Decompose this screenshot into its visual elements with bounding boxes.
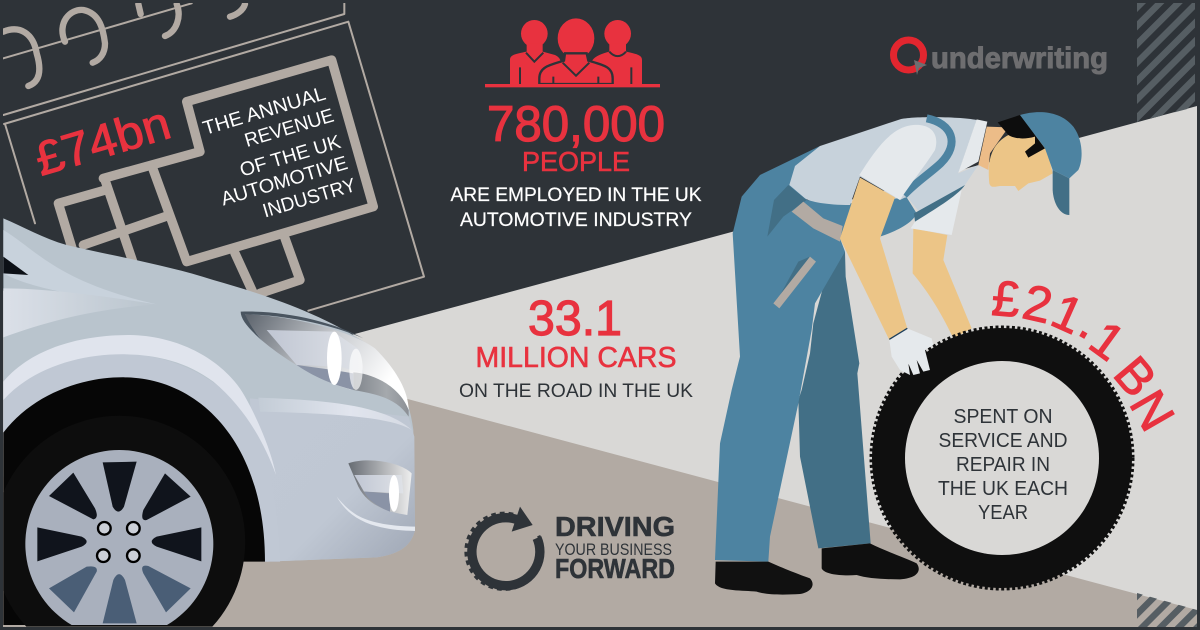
calendar outline xyxy=(4,22,424,311)
mechanic hair xyxy=(998,115,1045,158)
£21.1 BN curved figure: 1 xyxy=(1080,310,1135,372)
headlamp xyxy=(241,312,409,417)
shirt sleeve xyxy=(859,125,936,200)
mechanic figure xyxy=(715,112,1082,595)
annual revenue caption: OF THE UK xyxy=(237,131,343,182)
annual revenue caption xyxy=(200,83,358,222)
alloy rim xyxy=(25,450,213,625)
mechanic neck xyxy=(978,127,1008,170)
wheel nuts xyxy=(97,522,140,562)
car fender highlight xyxy=(3,335,276,475)
tyre centre xyxy=(905,361,1099,555)
people icon xyxy=(485,18,660,87)
left person xyxy=(510,20,561,84)
mechanic front arm xyxy=(840,178,907,340)
collar and arm lines xyxy=(520,52,631,84)
background: floor xyxy=(0,290,1197,630)
calendar date cells xyxy=(58,60,373,293)
logo ring xyxy=(894,40,924,70)
icon base line xyxy=(485,84,660,87)
underwriting logo xyxy=(894,40,1108,75)
cap peak xyxy=(1053,170,1069,215)
lower wheel spokes xyxy=(49,566,191,623)
mechanic torso shirt xyxy=(789,117,978,213)
33.1 number: 33.1 xyxy=(528,292,622,346)
tyre body xyxy=(872,328,1132,588)
£21.1 BN curved figure: B xyxy=(1103,346,1167,407)
driving your business forward logo: FORWARD xyxy=(555,553,675,584)
car xyxy=(3,218,415,627)
car fender xyxy=(3,354,280,562)
car hood crease xyxy=(3,288,157,337)
right person xyxy=(592,20,642,84)
mechanic overalls xyxy=(715,146,917,562)
tyre xyxy=(3,416,245,627)
tyre caption: YEAR xyxy=(978,502,1028,524)
gear arrow icon xyxy=(466,507,542,589)
overalls fold xyxy=(767,185,807,237)
driving your business forward logo xyxy=(466,507,675,589)
pocket shadow xyxy=(778,257,810,298)
mechanic near leg xyxy=(798,252,871,548)
tyre caption: REPAIR IN xyxy=(956,454,1050,476)
wheel arch xyxy=(3,377,265,625)
logo wordmark: underwriting xyxy=(931,42,1108,75)
front shoe xyxy=(715,562,813,595)
wheel spokes xyxy=(37,462,201,561)
centre person xyxy=(539,18,613,84)
car body xyxy=(3,218,415,562)
mechanic cap xyxy=(1020,112,1082,178)
driving your business forward logo: YOUR BUSINESS xyxy=(555,540,672,559)
annual revenue caption: INDUSTRY xyxy=(260,174,358,222)
car bonnet stripe xyxy=(258,398,412,430)
people label: PEOPLE xyxy=(522,146,630,177)
calendar graphic xyxy=(3,3,424,311)
stat: 780,000 people: AUTOMOTIVE INDUSTRY xyxy=(460,209,692,231)
bumper highlight xyxy=(337,497,415,531)
striped corner top right xyxy=(1137,3,1195,122)
stat: 33.1 million cars xyxy=(459,292,693,402)
tyre caption: THE UK EACH xyxy=(938,478,1068,500)
shirt collar xyxy=(958,119,987,173)
tyre graphic xyxy=(871,327,1133,589)
£74bn figure: £74bn xyxy=(29,96,176,186)
car lower bumper xyxy=(250,398,415,562)
road caption: ON THE ROAD IN THE UK xyxy=(459,380,693,402)
million cars label: MILLION CARS xyxy=(476,342,676,374)
£21.1 BN curved figure: £ xyxy=(990,270,1022,328)
calendar rings xyxy=(3,4,245,86)
annual revenue caption: THE ANNUAL xyxy=(200,83,328,140)
£21.1 BN curved figure xyxy=(990,270,1185,440)
stat: 780,000 people xyxy=(450,96,702,231)
tyre caption: SPENT ON xyxy=(954,406,1052,428)
overalls strap xyxy=(904,118,952,195)
car windscreen corner xyxy=(3,257,28,275)
back shoe xyxy=(822,543,919,579)
annual revenue caption: AUTOMOTIVE xyxy=(218,152,350,210)
£21.1 BN curved figure: . xyxy=(1070,295,1111,350)
mechanic glove xyxy=(889,328,933,375)
annual revenue caption: REVENUE xyxy=(242,105,337,152)
£21.1 BN curved figure: 2 xyxy=(1018,274,1058,334)
780,000 number: 780,000 xyxy=(487,96,665,152)
employment caption: ARE EMPLOYED IN THE UK xyxy=(450,184,702,206)
logo pointer xyxy=(914,60,927,75)
fog lamp xyxy=(348,460,412,515)
£21.1 BN curved figure: 1 xyxy=(1044,283,1092,345)
car hood highlight xyxy=(3,230,157,304)
£21.1 BN curved figure: N xyxy=(1119,381,1185,440)
overalls dark strip xyxy=(914,185,965,222)
tyre caption xyxy=(938,406,1068,524)
mechanic face xyxy=(989,133,1053,191)
mechanic back arm xyxy=(913,228,972,338)
pocket tool xyxy=(773,257,816,308)
calendar header lines xyxy=(3,3,344,115)
mechanic lower shirt xyxy=(911,190,962,235)
tyre tread xyxy=(871,327,1133,589)
tyre caption: SERVICE AND xyxy=(938,430,1068,452)
striped corner bottom right xyxy=(1137,593,1197,627)
tool belt xyxy=(792,202,843,242)
logo text: DRIVING xyxy=(555,511,675,542)
